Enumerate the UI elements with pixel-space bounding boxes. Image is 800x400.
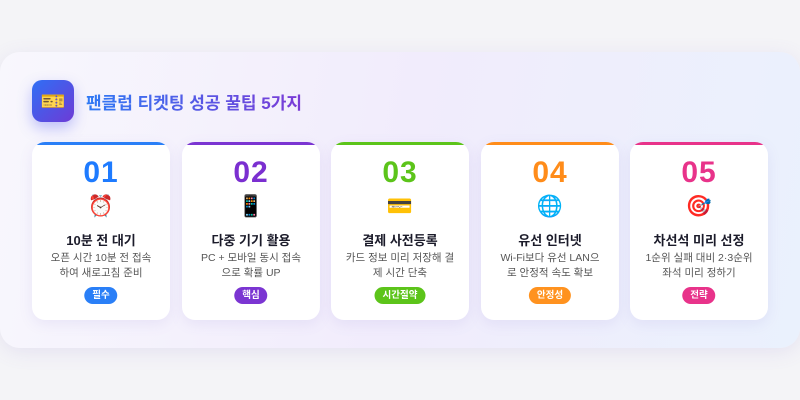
badge bbox=[529, 287, 571, 304]
description: 로 안정적 속도 확보 bbox=[507, 267, 593, 279]
description bbox=[645, 252, 753, 279]
description: 으로 확률 UP bbox=[221, 267, 281, 279]
card 02 bbox=[182, 142, 320, 320]
description: PC + 모바일 동시 접속 bbox=[201, 252, 301, 264]
description bbox=[201, 252, 301, 279]
badge: 안정성 bbox=[537, 290, 563, 301]
icon: ticket: 🎫 bbox=[41, 90, 65, 112]
badge: 전략 bbox=[690, 290, 708, 301]
number 02: 02 bbox=[233, 156, 269, 189]
panel: main bbox=[0, 52, 800, 348]
description: 1순위 실패 대비 2·3순위 bbox=[645, 252, 753, 264]
icon: ticket bbox=[32, 80, 74, 122]
title: 팬클럽 티켓팅 성공 꿀팁 5가지 bbox=[86, 94, 302, 113]
card 01 bbox=[32, 142, 170, 320]
description bbox=[346, 252, 454, 279]
description bbox=[51, 252, 151, 279]
card heading: 유선 인터넷 bbox=[518, 233, 582, 248]
card heading: 차선석 미리 선정 bbox=[654, 233, 744, 248]
icon: phone: 📱 bbox=[238, 195, 264, 218]
number 05: 05 bbox=[681, 156, 717, 189]
icon: alarm clock: ⏰ bbox=[88, 195, 114, 218]
badge bbox=[682, 287, 716, 304]
number 04: 04 bbox=[532, 156, 568, 189]
badge bbox=[375, 287, 425, 304]
icon: globe: 🌐 bbox=[537, 195, 563, 218]
badge bbox=[234, 287, 268, 304]
description: Wi-Fi보다 유선 LAN으 bbox=[500, 252, 600, 264]
number 01: 01 bbox=[83, 156, 119, 189]
description: 좌석 미리 정하기 bbox=[662, 267, 736, 279]
description: 카드 정보 미리 저장해 결 bbox=[346, 252, 454, 264]
icon: target: 🎯 bbox=[686, 195, 712, 218]
card 03 bbox=[331, 142, 469, 320]
card heading: 다중 기기 활용 bbox=[212, 233, 290, 248]
icon: card: 💳 bbox=[387, 195, 413, 218]
badge bbox=[84, 287, 118, 304]
description: 오픈 시간 10분 전 접속 bbox=[51, 252, 151, 264]
badge: 핵심 bbox=[242, 290, 260, 301]
card heading: 10분 전 대기 bbox=[66, 233, 136, 248]
card 05 bbox=[630, 142, 768, 320]
card 04 bbox=[481, 142, 619, 320]
badge: 시간절약 bbox=[383, 290, 417, 301]
number 03: 03 bbox=[382, 156, 418, 189]
description: 하여 새로고침 준비 bbox=[59, 267, 143, 279]
description bbox=[500, 252, 600, 279]
card heading: 결제 사전등록 bbox=[362, 233, 438, 248]
description: 제 시간 단축 bbox=[373, 267, 427, 279]
badge: 필수 bbox=[92, 290, 110, 301]
